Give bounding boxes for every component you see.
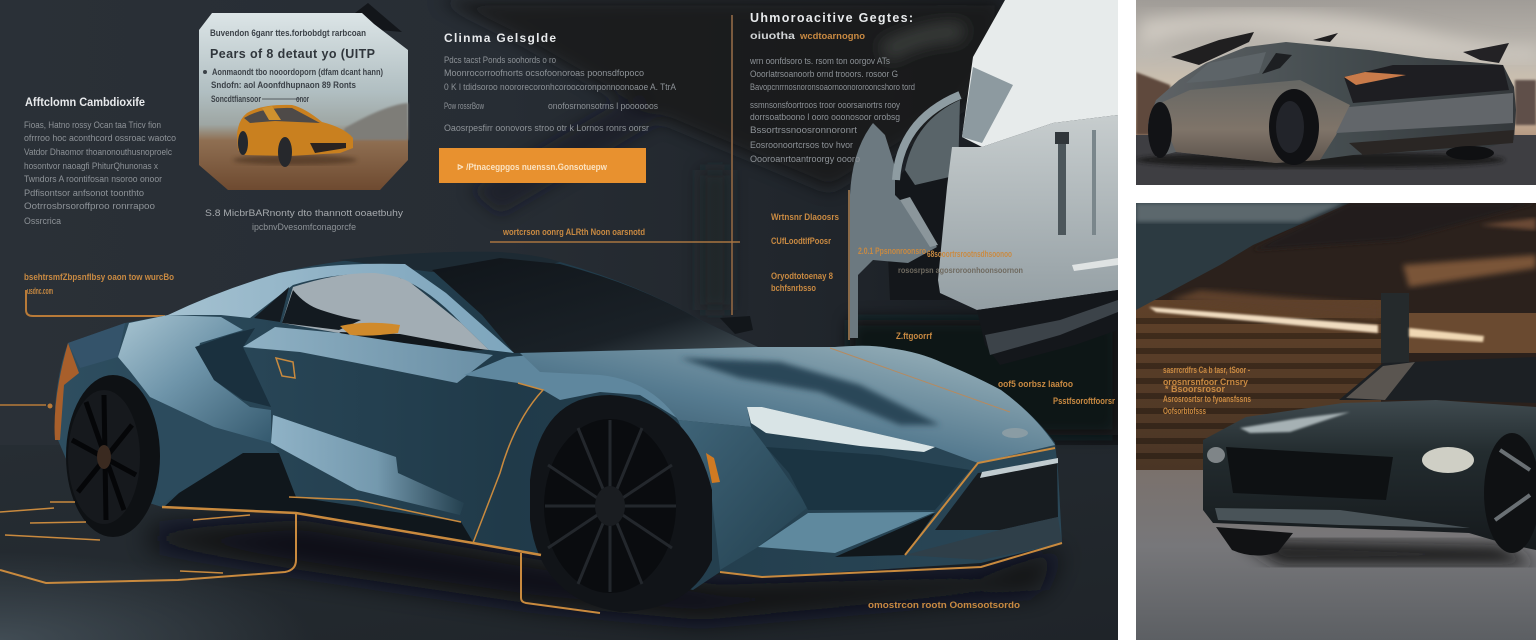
ceiling beam xyxy=(1136,203,1350,310)
black lower intake xyxy=(835,513,935,557)
door lower highlight xyxy=(271,415,464,515)
column: left intro text: Fioas, Hatno rossy Ocan taa Tricv fion xyxy=(24,120,161,130)
orange text overlay: orosnrsnfoor Crnsry xyxy=(1163,377,1248,387)
orange side marker xyxy=(706,453,720,483)
orange body lines xyxy=(0,383,1062,613)
dark cavity xyxy=(888,170,954,300)
top right photo: rear of grey car xyxy=(1135,0,1536,185)
column: left intro text: hosontvor naoagfi PhiturQhunonas x xyxy=(24,161,158,171)
orange annotation labels: Psstfsoroftfoorsr xyxy=(1053,396,1115,406)
bumper corner xyxy=(905,517,1062,560)
column: middle text: Clinma Gelsglde xyxy=(444,31,556,45)
orange annotation labels: wortcrson oonrg ALRth Noon oarsnotd xyxy=(502,227,645,237)
orange annotation labels: Wrtnsnr Dlaoosrs xyxy=(771,212,839,222)
column: middle text: Oaosrpesfirr oonovors stroo otr k Lornos ronrs oorsr xyxy=(444,123,649,133)
left arch panel xyxy=(850,123,937,338)
column: left intro text: ofrrroo hoc aconthcord ossroac waotco xyxy=(24,133,176,143)
orange annotation labels: oof5 oorbsz laafoo xyxy=(998,379,1073,389)
column: right heading and text: ssmnsonsfoortroos troor ooorsanortrs rooy xyxy=(750,100,900,110)
orange annotation labels: 68sooortrsrootnsdhsoonoo xyxy=(927,249,1012,259)
lower grey hull xyxy=(938,115,1118,310)
orange annotation labels: bchfsnrbsso xyxy=(771,283,816,293)
inset card with orange car: Aonmaondt tbo nooordoporn (dfam dcant hann) xyxy=(212,67,383,77)
hill in card xyxy=(340,103,408,140)
orange text overlay: Asrosrosrtsr to fyoansfssns xyxy=(1163,394,1251,404)
orange annotation labels: bsehtrsmfZbpsnflbsy oaon tow wurcBo xyxy=(24,272,174,282)
card caption: ipcbnvDvesomfconagorcfe xyxy=(252,222,356,232)
mirror stalk xyxy=(339,332,485,352)
column: left intro text xyxy=(24,97,176,226)
grey car xyxy=(1135,32,1516,168)
card caption: S.8 MicbrBARnonty dto thannott ooaetbuhy xyxy=(205,208,404,218)
column: right heading and text: wcdtoarnogno xyxy=(799,31,866,41)
orange annotation labels xyxy=(24,212,1115,406)
window dark reflection xyxy=(282,290,361,330)
under-body parts xyxy=(977,290,1118,320)
inset card with orange car: Sndofn: aol Aoonfdhupnaon 89 Ronts xyxy=(211,80,356,90)
inset card with orange car: Buvendon 6ganr ttes.forbobdgt rarbcoan xyxy=(210,28,366,38)
second arch strip xyxy=(896,95,960,180)
column: right heading and text: dorrsoatboono l ooro ooonosoor orobsg xyxy=(750,112,900,122)
rear flank xyxy=(272,447,278,452)
column: right heading and text: oiuotha xyxy=(750,31,796,42)
column: right heading and text: Uhmoroacitive Gegtes: xyxy=(750,11,913,25)
orange annotation labels: 2.0.1 Ppsnonroonsro xyxy=(858,246,926,256)
orange call-to-action button xyxy=(439,148,646,183)
front grille xyxy=(935,463,1058,530)
inset card with orange car: Pears of 8 detaut yo (UITP xyxy=(210,47,375,61)
bottom orange caption: omostrcon rootn Oomsootsordo xyxy=(868,600,1021,610)
light roof rim and A-pillar xyxy=(168,264,514,353)
column: middle text: onofosrnonsotrns l poooooos xyxy=(548,101,658,111)
orange text overlay xyxy=(1163,365,1251,416)
column: right heading and text: Oooroanrtoantroorgy oooro xyxy=(750,154,860,164)
main sports car xyxy=(0,252,1062,620)
column: left intro text: Pdfisontsor anfsonot toonthto xyxy=(24,188,144,198)
inset card with orange car: onor xyxy=(296,94,309,104)
rear orange glow xyxy=(55,343,79,440)
hood dark streak xyxy=(680,358,940,425)
mirror xyxy=(340,323,400,336)
machinery: grey vehicle body at right xyxy=(850,0,1118,365)
column: middle text xyxy=(444,31,676,133)
mid-grey arch interior xyxy=(905,100,960,185)
step xyxy=(1072,258,1118,271)
car body xyxy=(55,252,1062,590)
column: right heading and text xyxy=(749,11,915,164)
inset card with orange car: Soncdtfiansoor xyxy=(211,94,261,104)
rear quarter glass xyxy=(254,287,289,322)
column: middle text: Pdcs tacst Ponds soohords o ro xyxy=(444,55,556,65)
wood slat wall xyxy=(1136,300,1536,470)
black car xyxy=(1203,357,1536,565)
column: middle text: 0 K l tdidsoroo noororecoronhcoroocoronponnoonoaoe A. TtrA xyxy=(444,82,676,92)
orange call-to-action button: ⊳ /Ptnacegpgos nuenssn.Gonsotuepw xyxy=(457,162,608,173)
front intake panel xyxy=(766,447,970,510)
inset card with orange car xyxy=(199,3,408,190)
column: right heading and text: wrn oonfdsoro ts. rsom ton oorgov ATs xyxy=(749,56,890,66)
door strut xyxy=(1058,135,1066,235)
column: right heading and text: Bavopcnrrnosnoronsoaornoonororooncshoro tord xyxy=(750,82,915,92)
window diamond xyxy=(900,197,938,247)
shoulder panel xyxy=(118,315,271,443)
rear wheel xyxy=(66,375,160,537)
side window xyxy=(282,273,489,350)
door upper highlight xyxy=(243,327,493,383)
front fender top xyxy=(464,356,676,418)
orange annotation labels: CUfLoodtlfPoosr xyxy=(771,236,831,246)
column: left intro text: Ootrrosbrsoroffproo ronrrapoo xyxy=(24,201,155,211)
column: left intro text: Twndors A roontifosan nsoroo onoor xyxy=(24,174,162,184)
column: left intro text: Vatdor Dhaomor thoanonouthusnoproelc xyxy=(24,147,172,157)
front wheel xyxy=(530,395,712,612)
grille top strip xyxy=(980,458,1058,478)
orange car in card xyxy=(233,105,357,167)
orange annotation labels: rososrpsn agosroroonhoonsoornon xyxy=(898,266,1023,275)
column: middle text: Moonrocorroofnorts ocsofoonoroas poonsdfopoco xyxy=(444,68,644,78)
column: middle text: Pow rossrBow xyxy=(444,101,484,111)
white dome xyxy=(962,0,1118,147)
hood pinstripe xyxy=(830,348,1010,412)
scoop xyxy=(195,328,271,407)
card caption xyxy=(205,208,404,232)
dark roof xyxy=(339,252,560,272)
orange annotation labels: Z.ftgoorrf xyxy=(896,331,933,341)
orange text overlay: * Bsoorsrosor xyxy=(1165,384,1225,394)
door handle xyxy=(276,358,295,378)
rear haunch dark xyxy=(68,323,125,368)
orange annotation labels: usdnc.com xyxy=(27,286,53,296)
column: left intro text: Afftclomn Cambdioxife xyxy=(25,97,145,109)
hood xyxy=(520,346,1055,463)
black side intake xyxy=(165,453,473,542)
headlight xyxy=(747,407,935,452)
windshield xyxy=(432,258,758,353)
orange leader lines xyxy=(0,15,849,408)
car shadow xyxy=(150,520,1060,620)
column: right heading and text: Ooorlatrsoanoorb ornd trooors. rosoor G xyxy=(750,69,898,79)
orange text overlay: Oofsorbtofsss xyxy=(1163,406,1206,416)
column: left intro text: Ossrcrica xyxy=(24,216,61,226)
bottom right photo: black car in garage xyxy=(1136,203,1536,640)
column: right heading and text: Eosroonoortcrsos tov hvor xyxy=(750,140,853,150)
orange annotation labels: Oryodtotoenay 8 xyxy=(771,271,833,281)
column: right heading and text: Bssortrssnoosronnoronrt xyxy=(750,125,858,135)
lower bumper panel xyxy=(758,512,935,553)
badge xyxy=(1002,428,1028,438)
main panel background xyxy=(0,0,1118,640)
front side panel xyxy=(678,420,808,570)
orange text overlay: sasrrcrdfrs Ca b tasr, tSoor - xyxy=(1163,365,1250,375)
grey wedge xyxy=(962,67,1013,143)
